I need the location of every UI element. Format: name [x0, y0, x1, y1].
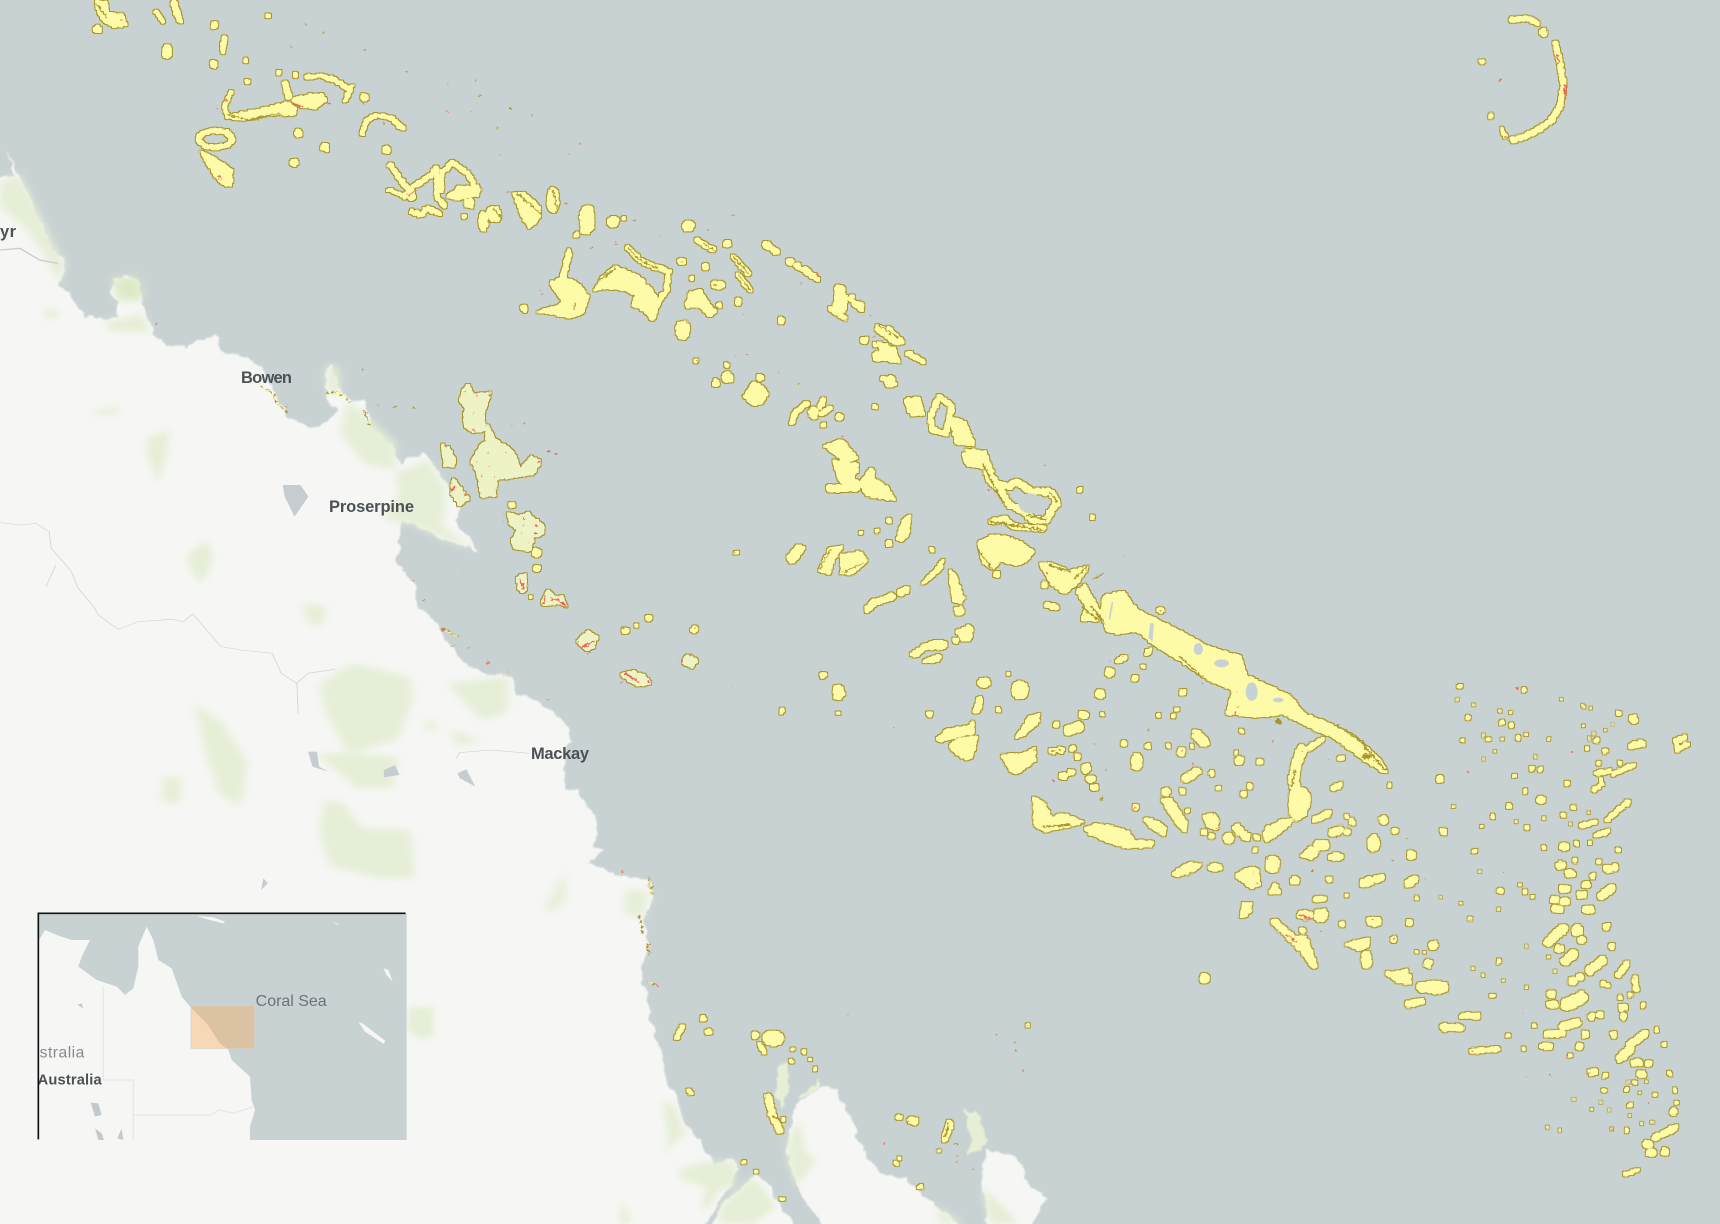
Whitsunday-side island [982, 1150, 1048, 1224]
coral damage: olive marks [96, 3, 1407, 1162]
city label: Bowen: Bowen [241, 369, 292, 387]
northern reefs [96, 2, 613, 235]
inset state borders [103, 987, 253, 1140]
inset frame [38, 913, 406, 1139]
mainland Queensland coast [0, 149, 995, 1224]
inset lakes [77, 1003, 123, 1140]
rivers and lakes [0, 248, 529, 890]
inset islands [197, 916, 393, 1044]
upper outer reef clusters [768, 246, 993, 472]
outer barrier reef band [963, 450, 1387, 772]
city label: Mackay: Mackay [531, 745, 590, 763]
eastern Swain reefs [1400, 686, 1687, 1174]
vegetation patches north [0, 175, 474, 583]
southern lagoon reefs [1028, 732, 1440, 1026]
inset label: Coral Sea: Coral Sea [256, 993, 327, 1010]
central-north reefs [524, 210, 897, 500]
vegetation patches central [161, 542, 650, 920]
vegetation patch beside inset [408, 1007, 434, 1040]
inset sea [39, 914, 407, 1140]
southern coastal reefs [677, 1018, 950, 1199]
inset label: Australia: Australia [38, 1072, 103, 1088]
vegetation patches south [620, 1100, 1020, 1224]
inset land [39, 927, 255, 1140]
crescent atoll [1482, 18, 1563, 140]
offshore islands [776, 1060, 987, 1157]
city label: Ayr: yr [0, 223, 17, 241]
inset study area [191, 1006, 254, 1048]
thin coastal fringe reefs [261, 370, 656, 985]
central lagoon reefs [782, 515, 1110, 787]
inset label: stralia: stralia [40, 1045, 85, 1062]
city label: Proserpine: Proserpine [329, 498, 414, 516]
locator inset map [38, 913, 407, 1140]
Whitsunday and inner reefs [442, 377, 736, 685]
lagoon holes in outer reef [1018, 493, 1284, 702]
